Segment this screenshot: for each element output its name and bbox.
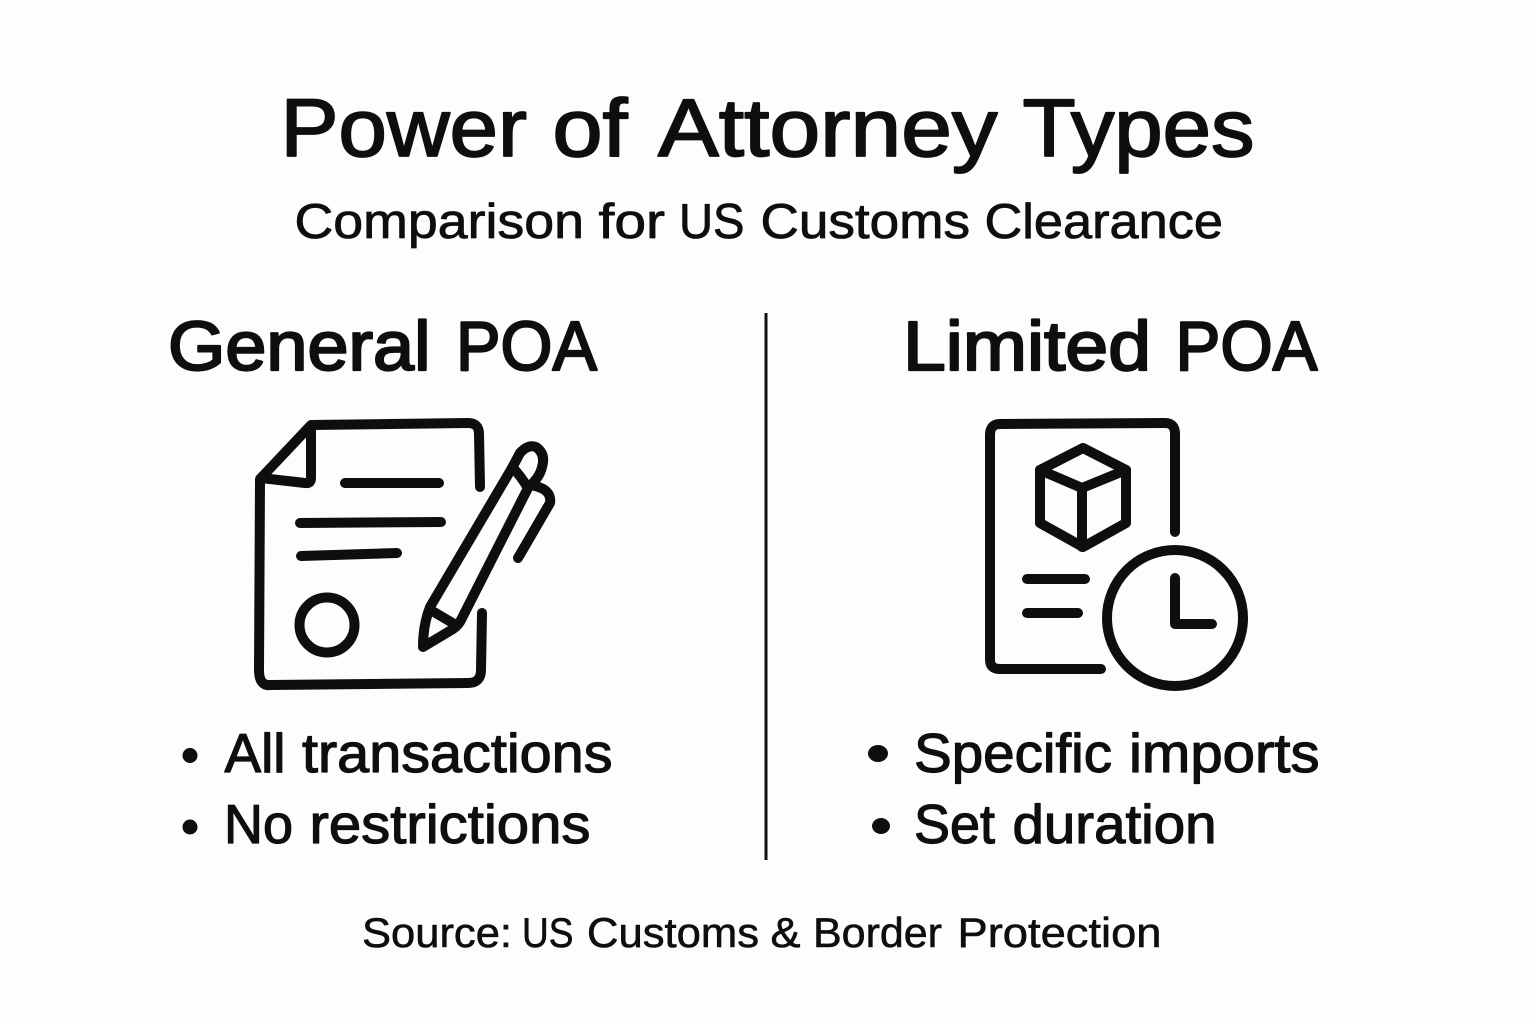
bullet dot — [182, 820, 198, 834]
subtitle: for — [598, 195, 665, 249]
subtitle: Customs — [760, 195, 970, 249]
source note: Customs — [587, 909, 759, 956]
panel: General POA — [168, 307, 612, 855]
bullet text: restrictions — [310, 793, 590, 855]
heading: Limited POA: POA — [1176, 307, 1318, 385]
bullet text: Set — [914, 793, 995, 855]
bullet text: No — [224, 793, 293, 855]
divider — [764, 313, 768, 860]
heading: General POA: General — [168, 307, 430, 385]
bullet dot — [872, 818, 890, 834]
source note: Border — [813, 909, 942, 956]
subtitle: Clearance — [984, 195, 1223, 249]
source note: & — [770, 909, 800, 956]
title: Attorney — [658, 83, 998, 174]
subtitle: Comparison — [294, 195, 584, 249]
title: of — [552, 83, 628, 174]
bullet dot — [868, 745, 888, 762]
title: Types — [1022, 83, 1254, 174]
bullet text: Specific — [914, 722, 1112, 784]
panel: Limited POA — [868, 307, 1320, 855]
icon: signed document with pen — [259, 423, 550, 685]
heading: Limited POA: Limited — [903, 307, 1151, 385]
bullet dot — [182, 748, 198, 763]
bullet text: imports — [1129, 722, 1320, 784]
source note: Source: — [362, 909, 512, 956]
title: Power — [280, 83, 527, 174]
bullet text: duration — [1012, 793, 1216, 855]
bullet text: transactions — [302, 722, 612, 784]
heading: General POA: POA — [456, 307, 597, 385]
source note: US — [522, 909, 574, 956]
bullet list: General POA — [182, 722, 612, 855]
subtitle: US — [679, 195, 744, 249]
icon: document with package and clock — [990, 423, 1243, 686]
source note: Protection — [958, 909, 1162, 956]
bullet list: Limited POA — [868, 722, 1320, 855]
bullet text: All — [224, 722, 286, 784]
